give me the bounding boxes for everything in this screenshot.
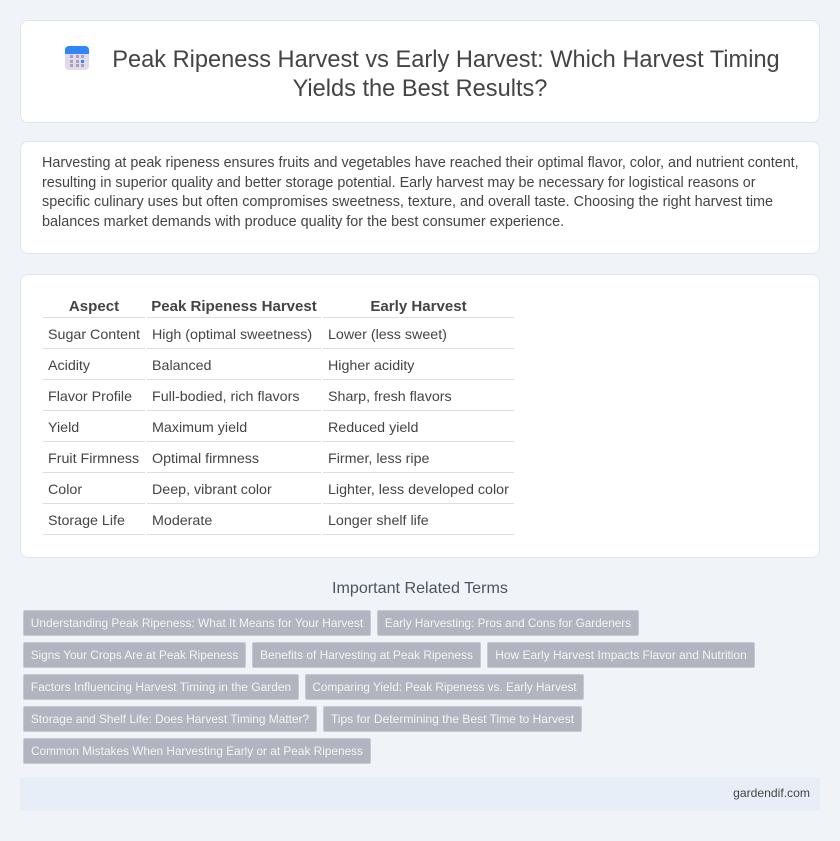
footer credit: gardendif.com bbox=[733, 786, 810, 800]
tag: Storage and Shelf Life: Does Harvest Timing Matter? bbox=[31, 712, 309, 726]
icon: calendar bbox=[65, 46, 89, 70]
intro text: Harvesting at peak ripeness ensures fruits and vegetables have reached their optimal flavor, color, and nutrient content, bbox=[42, 155, 799, 171]
row: sugar content bbox=[48, 327, 447, 343]
footer bar bbox=[20, 777, 820, 811]
tag: Comparing Yield: Peak Ripeness vs. Early Harvest bbox=[312, 681, 577, 694]
title: Peak Ripeness Harvest vs Early Harvest: Which Harvest Timing bbox=[112, 47, 780, 73]
table header: Peak Ripeness Harvest bbox=[151, 298, 317, 315]
tag: Factors Influencing Harvest Timing in the Garden bbox=[31, 680, 291, 694]
tag bbox=[23, 610, 371, 636]
tag bbox=[252, 642, 481, 668]
tag bbox=[23, 674, 299, 700]
row: flavor profile: Sharp, fresh flavors bbox=[328, 389, 452, 405]
row: flavor profile bbox=[48, 389, 452, 405]
row: sugar content: High (optimal sweetness) bbox=[152, 327, 312, 343]
intro text: specific culinary uses but often compromises sweetness, texture, and overall taste. Choosing the right harvest time bbox=[42, 194, 773, 210]
tag bbox=[487, 642, 755, 668]
panel: title card bbox=[20, 20, 820, 123]
row: acidity: Balanced bbox=[152, 358, 212, 374]
row: yield bbox=[48, 420, 418, 436]
row: fruit firmness: Optimal firmness bbox=[152, 451, 259, 467]
row: yield: Maximum yield bbox=[152, 420, 247, 436]
row: sugar content: Lower (less sweet) bbox=[328, 327, 447, 343]
table header bbox=[69, 298, 467, 315]
related term tags bbox=[23, 610, 755, 764]
tag bbox=[23, 738, 371, 764]
row: color: Lighter, less developed color bbox=[328, 482, 509, 498]
tag bbox=[377, 610, 639, 636]
row: yield: Reduced yield bbox=[328, 420, 418, 436]
tag: Tips for Determining the Best Time to Harvest bbox=[331, 712, 574, 726]
tag: Early Harvesting: Pros and Cons for Gardeners bbox=[385, 617, 631, 630]
title: Yields the Best Results? bbox=[293, 76, 547, 102]
row: sugar content: Sugar Content bbox=[48, 327, 140, 343]
tag: Common Mistakes When Harvesting Early or at Peak Ripeness bbox=[31, 744, 363, 758]
tag bbox=[23, 642, 246, 668]
intro text: balances market demands with produce quality for the best consumer experience. bbox=[42, 214, 564, 230]
row: yield: Yield bbox=[48, 420, 79, 436]
row: fruit firmness bbox=[48, 451, 429, 467]
row: storage life: Longer shelf life bbox=[328, 513, 429, 529]
tag bbox=[323, 706, 582, 732]
row: flavor profile: Full-bodied, rich flavors bbox=[152, 389, 299, 405]
row: flavor profile: Flavor Profile bbox=[48, 389, 132, 405]
panel: intro card bbox=[20, 141, 820, 254]
table header: Early Harvest bbox=[370, 298, 467, 315]
title bbox=[112, 47, 780, 102]
row: storage life bbox=[48, 513, 429, 529]
row: color: Deep, vibrant color bbox=[152, 482, 272, 498]
tag: Benefits of Harvesting at Peak Ripeness bbox=[260, 648, 473, 662]
heading: related terms: Important Related Terms bbox=[332, 579, 508, 597]
intro text bbox=[42, 155, 799, 230]
tag bbox=[305, 674, 584, 700]
row: color bbox=[48, 482, 509, 498]
tag: How Early Harvest Impacts Flavor and Nutrition bbox=[495, 648, 747, 662]
row: acidity: Acidity bbox=[48, 358, 90, 374]
row: fruit firmness: Firmer, less ripe bbox=[328, 451, 429, 467]
row: storage life: Storage Life bbox=[48, 513, 125, 529]
comparison table bbox=[43, 298, 514, 535]
row: storage life: Moderate bbox=[152, 513, 212, 529]
row: color: Color bbox=[48, 482, 82, 498]
row: fruit firmness: Fruit Firmness bbox=[48, 451, 139, 467]
row: acidity bbox=[48, 358, 414, 374]
intro text: resulting in superior quality and better storage potential. Early harvest may be necessary for logistical reasons or bbox=[42, 175, 756, 191]
tag: Signs Your Crops Are at Peak Ripeness bbox=[31, 649, 238, 662]
tag bbox=[23, 706, 317, 732]
tag: Understanding Peak Ripeness: What It Means for Your Harvest bbox=[31, 616, 363, 630]
row: acidity: Higher acidity bbox=[328, 358, 414, 374]
panel: comparison table card bbox=[20, 274, 820, 558]
table header: Aspect bbox=[69, 298, 119, 315]
